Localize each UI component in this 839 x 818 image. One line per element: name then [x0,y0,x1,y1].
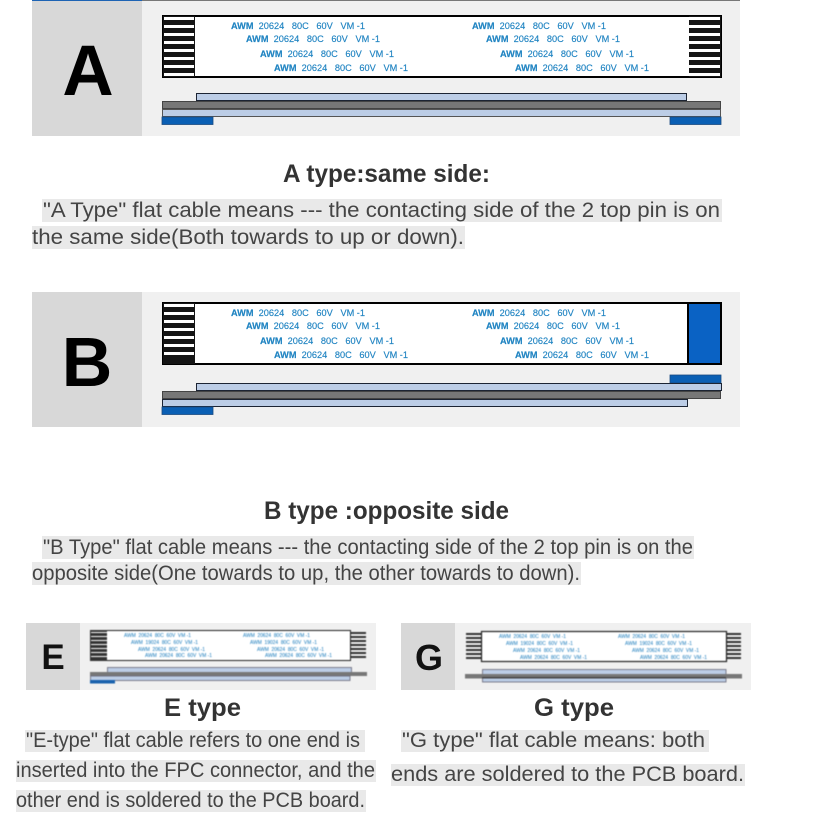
heading: A type: A type:same side: [283,160,490,188]
cable side view G [465,670,742,682]
cable top view A: AWM 20624 80C 60V VM -1 [231,21,365,32]
cable side view B [162,375,722,414]
text block: G type description: ends are soldered to the PCB board. [391,763,744,786]
cable top view A: AWM 20624 80C 60V VM -1 [486,34,620,45]
text block: A type description: "A Type" flat cable means --- the contacting side of the 2 top pin is on [43,199,720,222]
cable side view E [90,668,367,684]
cable top view B: AWM 20624 80C 60V VM -1 [515,350,649,361]
cable side view A [162,94,721,124]
letter B: B [62,323,112,401]
text block: E type description: "E-type" flat cable refers to one end is [26,729,360,752]
cable top view B [163,303,721,364]
cable top view B: AWM 20624 80C 60V VM -1 [500,336,634,347]
cable top view G: AWM 19024 80C 60V VM -1 [625,641,692,647]
cable top view G: AWM 20624 80C 60V VM -1 [499,634,566,640]
cable top view E: AWM 19024 80C 60V VM -1 [131,640,198,646]
cable top view A [163,16,721,77]
text block: A type description: the same side(Both towards to up or down). [32,226,464,249]
cable top view E: AWM 20624 80C 60V VM -1 [145,653,212,659]
panel: A type diagram [32,0,740,136]
text block: B type description: "B Type" flat cable means --- the contacting side of the 2 top pin is on the [43,536,693,559]
cable top view G: AWM 20624 80C 60V VM -1 [632,648,699,654]
panel: B type diagram [32,292,740,427]
cable top view G [466,632,741,662]
text block: B type description [32,536,694,585]
cable top view G: AWM 20624 80C 60V VM -1 [618,634,685,640]
text block: B type description: opposite side(One towards to up, the other towards to down). [32,562,580,585]
cable top view A: AWM 20624 80C 60V VM -1 [246,34,380,45]
cable top view G: AWM 20624 80C 60V VM -1 [513,648,580,654]
text block: E type description: other end is soldered to the PCB board. [16,789,365,812]
text block: G type description: "G type" flat cable means: both [402,729,705,752]
heading: B type: B type :opposite side [264,497,509,525]
panel: E type diagram [26,623,376,690]
cable top view B: AWM 20624 80C 60V VM -1 [274,350,408,361]
cable top view G: AWM 19024 80C 60V VM -1 [506,641,573,647]
heading: E type: E type [164,694,241,722]
cable top view B: AWM 20624 80C 60V VM -1 [246,321,380,332]
heading: G type: G type [534,694,614,722]
letter G: G [415,637,443,678]
cable top view B: AWM 20624 80C 60V VM -1 [231,308,365,319]
cable top view A: AWM 20624 80C 60V VM -1 [274,63,408,74]
cable top view A: AWM 20624 80C 60V VM -1 [515,63,649,74]
text block: G type description [391,729,745,786]
letter E: E [41,638,65,677]
cable top view A: AWM 20624 80C 60V VM -1 [472,21,606,32]
cable top view B: AWM 20624 80C 60V VM -1 [472,308,606,319]
cable top view E: AWM 20624 80C 60V VM -1 [243,633,310,639]
text block: E type description: inserted into the FPC connector, and the [16,759,375,782]
letter A: A [62,32,114,111]
text block: E type description [16,729,376,812]
cable top view G: AWM 20624 80C 60V VM -1 [520,655,587,661]
cable top view E: AWM 20624 80C 60V VM -1 [265,653,332,659]
cable top view G: AWM 20624 80C 60V VM -1 [640,655,707,661]
cable top view E: AWM 20624 80C 60V VM -1 [124,633,191,639]
cable top view E [90,630,366,661]
cable top view E: AWM 20624 80C 60V VM -1 [257,647,324,653]
cable top view E: AWM 20624 80C 60V VM -1 [138,647,205,653]
panel: G type diagram [401,623,751,690]
cable top view E: AWM 19024 80C 60V VM -1 [250,640,317,646]
text block: A type description [32,199,722,249]
cable top view B: AWM 20624 80C 60V VM -1 [260,336,394,347]
cable top view B: AWM 20624 80C 60V VM -1 [486,321,620,332]
cable top view A: AWM 20624 80C 60V VM -1 [500,49,634,60]
cable top view A: AWM 20624 80C 60V VM -1 [260,49,394,60]
